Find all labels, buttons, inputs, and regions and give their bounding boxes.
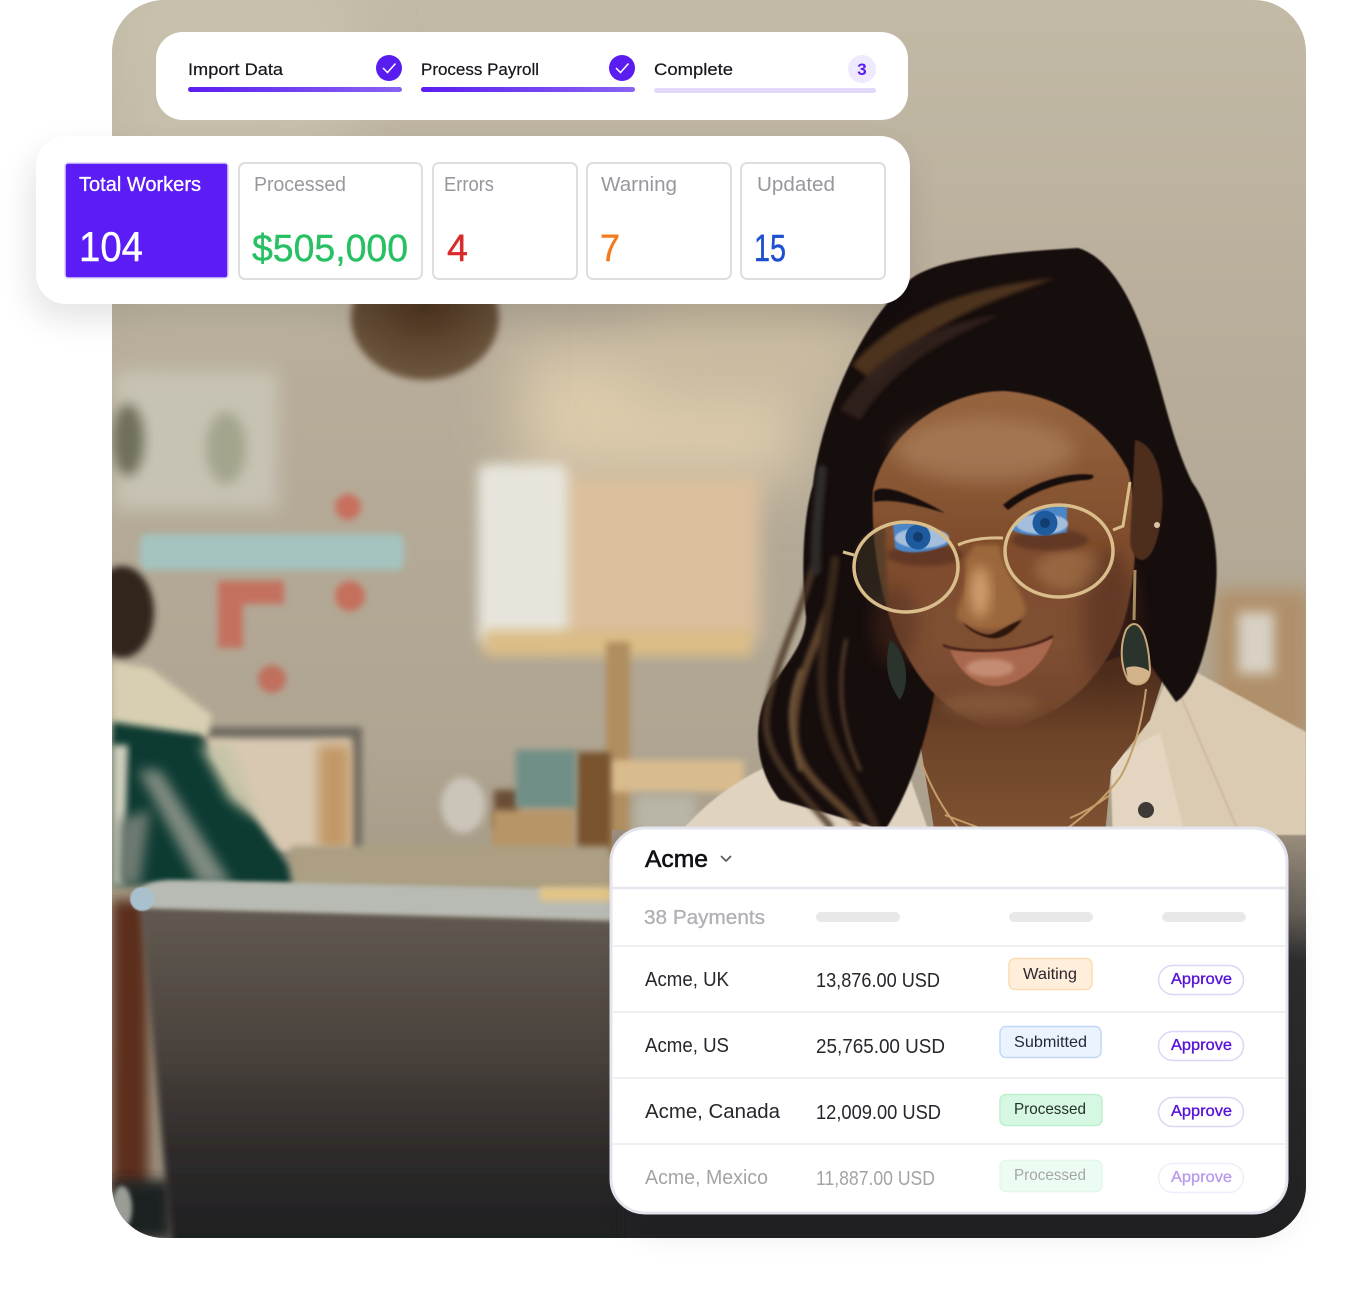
step: process payroll: Process Payroll [421, 60, 539, 79]
shirt [1111, 660, 1306, 835]
shadow: stats card [30, 150, 910, 320]
step: complete: Complete [654, 60, 733, 79]
shirt button [1138, 802, 1154, 818]
row: Acme Canada: 12,009.00 USD [816, 1102, 941, 1124]
table header row [644, 907, 1246, 929]
row: Acme US: 25,765.00 USD [816, 1036, 945, 1058]
wall pictures [114, 370, 278, 510]
row: Acme US: Approve [1171, 1037, 1232, 1054]
eye shadow under right lens [1012, 529, 1088, 551]
necklace [921, 689, 1146, 830]
step: process payroll [421, 55, 635, 92]
stat: warning [587, 163, 731, 279]
nose [957, 545, 1026, 630]
wooden wall disc [346, 304, 504, 384]
panel: stats [36, 136, 910, 304]
step: import data: Import Data [188, 60, 284, 79]
row: Acme US [645, 1026, 1244, 1060]
row: Acme UK: Acme, UK [645, 969, 730, 991]
stat: updated: 15 [754, 228, 786, 270]
stat: total workers [65, 163, 228, 278]
right wall box [1215, 590, 1310, 735]
eye shadow under left lens [887, 544, 963, 566]
row: Acme UK: Approve [1171, 971, 1232, 988]
row: Acme UK: Waiting [1023, 966, 1077, 983]
earrings [1134, 570, 1135, 620]
lamp [555, 476, 760, 641]
table header row: 38 Payments [644, 907, 765, 929]
step: complete [654, 55, 876, 93]
row: Acme Canada: Acme, Canada [645, 1101, 781, 1123]
forehead light [895, 418, 1075, 482]
step: complete: 3 [857, 60, 867, 79]
stat: errors: 4 [447, 228, 468, 270]
row: Acme US: Acme, US [645, 1035, 729, 1057]
glasses [843, 482, 1130, 612]
stat: total workers: 104 [79, 223, 143, 270]
row: Acme Mexico (faded): Acme, Mexico [645, 1167, 768, 1189]
dark lower right [612, 830, 1306, 1238]
row: Acme Canada: Processed [1014, 1101, 1086, 1118]
row: Acme Canada [645, 1094, 1244, 1126]
lips [950, 638, 1053, 686]
eye reflections [893, 523, 951, 552]
stat: processed [239, 163, 422, 279]
shadow: payments table [625, 860, 1295, 1235]
blurred laptop [130, 880, 620, 1250]
row: Acme Canada: Approve [1171, 1103, 1232, 1120]
stat: warning: Warning [601, 174, 677, 196]
stat: updated: Updated [757, 174, 835, 196]
woman [678, 248, 1306, 835]
ear [1130, 440, 1163, 560]
row: Acme Mexico (faded): 11,887.00 USD [816, 1168, 935, 1190]
table heading: Acme [645, 846, 708, 873]
desk items [606, 760, 744, 792]
row: Acme US: Submitted [1014, 1034, 1087, 1051]
row: Acme UK [645, 958, 1244, 994]
neck [921, 656, 1162, 826]
face shadows [1082, 550, 1138, 690]
row: Acme UK: 13,876.00 USD [816, 970, 940, 992]
lens cheek light [1035, 550, 1105, 590]
teal wall strip [140, 534, 404, 570]
row: Acme Mexico (faded) [645, 1160, 1244, 1192]
stat: warning: 7 [600, 228, 620, 270]
left lens tint [855, 527, 888, 610]
stat: updated [741, 163, 885, 279]
stat: errors [433, 163, 577, 279]
step: import data [188, 55, 402, 92]
hair [758, 248, 1217, 830]
blurred colleague at left [90, 566, 292, 1240]
stat: total workers: Total Workers [79, 174, 201, 196]
panel: payments table [611, 828, 1287, 1213]
stat: processed: Processed [254, 174, 346, 196]
stat: errors: Errors [444, 174, 494, 196]
hair strands left [766, 470, 875, 826]
row: Acme Mexico (faded): Processed [1014, 1167, 1086, 1184]
panel: progress steps [156, 32, 908, 120]
stat: processed: $505,000 [252, 228, 408, 270]
face [873, 391, 1136, 728]
eyebrows [874, 489, 945, 513]
row: Acme Mexico (faded): Approve [1171, 1169, 1232, 1186]
